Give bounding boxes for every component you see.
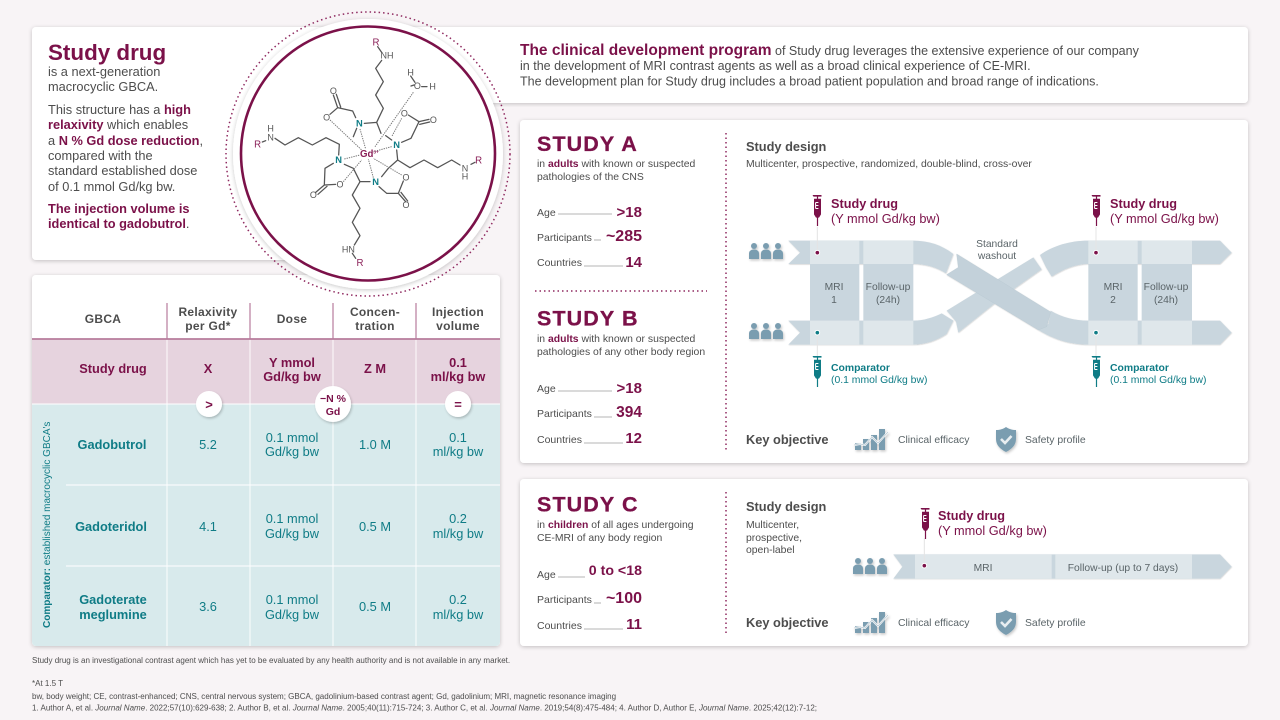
timeline arrow <box>893 538 1232 579</box>
study design text: prospective, <box>746 533 802 544</box>
program description text <box>520 42 1140 88</box>
intro text block: of 0.1 mmol Gd/kg bw. <box>48 179 175 194</box>
study drug row: ml/kg bw <box>431 369 485 384</box>
chemical structure of gadolinium complex: N <box>356 118 363 128</box>
footnotes: *At 1.5 T <box>32 679 63 688</box>
footnotes: 1. Author A, et al. Journal Name. 2022;57(10):629-638; 2. Author B, et al. Journal Name. 2005;40(11):715-724; 3. Author C, et al. Journal Name. 2019;54(8):475-484; 4. Author D, Author E, Journal Name. 2025;42(12):7-12; <box>32 704 817 712</box>
gadoteridol row: Gadoteridol <box>75 519 147 534</box>
study C summary: Age <box>537 569 556 581</box>
gadoteridol row: 4.1 <box>199 519 217 534</box>
gadoterate meglumine row: 0.2 <box>449 592 467 607</box>
syringe and label: comparator dose 1 <box>812 356 927 387</box>
single-arm study diagram: MRI <box>974 563 992 574</box>
bottom right band <box>1038 311 1232 345</box>
syringe and label: study drug dose 1: Study drug <box>831 197 898 211</box>
chemical structure of gadolinium complex: Gd <box>360 149 373 160</box>
gadobutrol row <box>78 430 484 459</box>
key objective row: Key objective <box>746 432 829 447</box>
icon: safety shield <box>996 610 1016 635</box>
panel: study A and study B <box>520 120 1248 463</box>
gadoterate meglumine row: 3.6 <box>199 599 217 614</box>
gadobutrol row: Gadobutrol <box>78 437 146 452</box>
column labels: 1 <box>831 295 837 306</box>
table header: GBCA <box>85 312 121 326</box>
column labels: MRI <box>1104 282 1122 293</box>
key objective row <box>746 427 1086 452</box>
panel: study drug intro <box>32 27 332 260</box>
study A summary: ~285 <box>606 228 642 245</box>
syringe and label: comparator dose 2 <box>1092 356 1206 387</box>
column labels <box>825 239 1189 306</box>
chemical structure of gadolinium complex: R <box>475 156 482 167</box>
gadobutrol row: 1.0 M <box>359 437 391 452</box>
icon: safety shield <box>996 427 1016 452</box>
chemical structure of gadolinium complex: O <box>330 86 337 96</box>
study drug row <box>79 355 485 384</box>
syringe and label: study drug <box>920 508 1047 539</box>
top left band <box>788 241 953 273</box>
crossing strip falling <box>947 254 1051 330</box>
study B summary: 394 <box>616 404 642 421</box>
rotated comparator label: Comparator: established macrocyclic GBCA's <box>42 422 53 628</box>
badge: equal <box>445 391 471 417</box>
intro text block: identical to gadobutrol. <box>48 216 189 231</box>
gadobutrol row: 5.2 <box>199 437 217 452</box>
syringe and label: study drug dose 2: (Y mmol Gd/kg bw) <box>1110 211 1219 226</box>
syringe and label: comparator dose 1: Comparator <box>831 363 890 374</box>
single-arm study diagram <box>853 508 1232 579</box>
footnotes: Study drug is an investigational contrast agent which has yet to be evaluated by any health authority and is not available in any market. <box>32 656 510 665</box>
badge: greater than: > <box>205 397 213 412</box>
intro text block: compared with the <box>48 148 153 163</box>
syringe and label: study drug dose 2 <box>1092 195 1219 226</box>
gadoteridol row: 0.2 <box>449 511 467 526</box>
chemical structure of gadolinium complex: N <box>335 155 342 165</box>
gadoterate meglumine row: ml/kg bw <box>433 607 484 622</box>
syringe and label: comparator dose 1: (0.1 mmol Gd/kg bw) <box>831 375 927 386</box>
study B summary: Participants <box>537 408 592 420</box>
comparator rows background <box>32 404 500 646</box>
column labels: (24h) <box>1154 295 1178 306</box>
study A summary: Countries <box>537 257 582 269</box>
study C summary: ~100 <box>606 590 642 607</box>
badge: equal: = <box>454 397 462 412</box>
study design text: Multicenter, <box>746 520 799 531</box>
column labels: (24h) <box>876 295 900 306</box>
chemical structure of gadolinium complex: N <box>372 177 379 187</box>
chemical structure of gadolinium complex: O <box>402 200 409 210</box>
study B summary: in adults with known or suspected <box>537 334 695 345</box>
intro text block: is a next-generation <box>48 64 160 79</box>
chemical structure of gadolinium complex: H <box>407 67 414 77</box>
panel: study C <box>520 479 1248 646</box>
intro text block: a N % Gd dose reduction, <box>48 133 203 148</box>
study B summary: 12 <box>625 430 642 447</box>
gadoterate meglumine row: meglumine <box>79 607 147 622</box>
table header: Concen- <box>350 305 400 319</box>
column labels: Follow-up <box>866 282 911 293</box>
molecule structure circle <box>226 12 510 296</box>
study C summary: Participants <box>537 594 592 606</box>
study drug row: Y mmol <box>269 355 315 370</box>
badge: greater than <box>196 391 222 417</box>
chemical structure of gadolinium complex: R <box>373 37 380 48</box>
gadoteridol row <box>75 511 484 541</box>
study drug row: Gd/kg bw <box>263 369 321 384</box>
syringe and label: study drug: Study drug <box>938 509 1005 523</box>
gadobutrol row: Gd/kg bw <box>265 444 320 459</box>
chemical structure of gadolinium complex: N <box>462 163 468 173</box>
gadoterate meglumine row: Gd/kg bw <box>265 607 320 622</box>
gadoterate meglumine row: Gadoterate <box>79 592 147 607</box>
icon: clinical efficacy chart <box>854 429 888 450</box>
study C summary: 0 to <18 <box>589 563 642 579</box>
chemical structure of gadolinium complex: O <box>402 172 409 182</box>
study B summary <box>537 306 705 447</box>
chemical structure of gadolinium complex: H <box>462 171 468 181</box>
study drug row: Z M <box>364 361 386 376</box>
key objective row: Safety profile <box>1025 435 1086 446</box>
participants icons top <box>749 243 783 259</box>
key objective row: Clinical efficacy <box>898 618 970 629</box>
gadoteridol row: 0.1 mmol <box>266 511 318 526</box>
intro text block: standard established dose <box>48 163 197 178</box>
column labels: Follow-up <box>1144 282 1189 293</box>
study A summary: >18 <box>617 204 642 221</box>
study drug row: Study drug <box>79 361 147 376</box>
program description text: The clinical development program of Study drug leverages the extensive experience of our company <box>520 42 1140 59</box>
study B summary: Age <box>537 383 556 395</box>
badge: minus N percent Gd <box>315 386 351 422</box>
chemical structure of gadolinium complex: H <box>267 124 274 134</box>
MRI and follow-up columns <box>810 264 1192 321</box>
table header: Dose <box>277 312 307 326</box>
syringe and label: comparator dose 2: (0.1 mmol Gd/kg bw) <box>1110 375 1206 386</box>
chemical structure of gadolinium complex: 3+ <box>373 150 379 155</box>
cross-over study diagram <box>749 195 1232 387</box>
intro text block: The injection volume is <box>48 201 190 216</box>
key objective row: Key objective <box>746 615 829 630</box>
study design heading: Multicenter, prospective, randomized, double-blind, cross-over <box>746 159 1032 170</box>
table header: volume <box>436 319 480 333</box>
footnotes: bw, body weight; CE, contrast-enhanced; CNS, central nervous system; GBCA, gadolinium-based contrast agent; Gd, gadolinium; MRI, magnetic resonance imaging <box>32 692 616 701</box>
study B summary: >18 <box>617 380 642 397</box>
table header: tration <box>355 319 395 333</box>
study B summary: Countries <box>537 434 582 446</box>
chemical structure of gadolinium complex: NH <box>381 51 393 61</box>
study drug row: 0.1 <box>449 355 467 370</box>
program description text: in the development of MRI contrast agents as well as a broad clinical experience of CE-MRI. <box>520 59 1031 73</box>
study design heading <box>746 139 1032 170</box>
study B summary: STUDY B <box>537 306 639 330</box>
single-arm study diagram: Follow-up (up to 7 days) <box>1068 563 1178 574</box>
icon: clinical efficacy chart <box>854 612 888 633</box>
gadoterate meglumine row: 0.5 M <box>359 599 391 614</box>
crossing strip rising <box>947 257 1042 333</box>
study A summary: pathologies of the CNS <box>537 172 644 183</box>
chemical structure of gadolinium complex: H <box>429 82 436 92</box>
key objective row: Safety profile <box>1025 618 1086 629</box>
study B summary: pathologies of any other body region <box>537 347 705 358</box>
chemical structure of gadolinium complex: O <box>414 81 421 91</box>
column labels: 2 <box>1110 295 1116 306</box>
panel: GBCA comparison table <box>32 275 500 646</box>
chemical structure of gadolinium complex: R <box>254 140 261 151</box>
study C summary: 11 <box>626 616 642 633</box>
badge: minus N percent Gd: −N % <box>320 393 347 405</box>
intro text block: macrocyclic GBCA. <box>48 79 158 94</box>
study A summary: Age <box>537 207 556 219</box>
key objective row <box>746 610 1086 635</box>
participants icons bottom <box>749 323 783 339</box>
syringe and label: study drug dose 1: (Y mmol Gd/kg bw) <box>831 211 940 226</box>
intro text block <box>48 64 203 231</box>
gadoterate meglumine row <box>79 592 484 622</box>
badge: minus N percent Gd: Gd <box>326 406 340 418</box>
study C summary: in children of all ages undergoing <box>537 520 694 531</box>
column labels: washout <box>977 251 1016 262</box>
study C summary: Countries <box>537 620 582 632</box>
study C summary <box>537 492 694 633</box>
syringe and label: comparator dose 2: Comparator <box>1110 363 1169 374</box>
chemical structure of gadolinium complex: O <box>310 190 317 200</box>
study A summary: in adults with known or suspected <box>537 159 695 170</box>
chemical structure of gadolinium complex: O <box>323 112 330 122</box>
participants icons <box>853 558 887 574</box>
intro text block: This structure has a high <box>48 102 191 117</box>
table header <box>85 305 484 333</box>
chemical structure of gadolinium complex: R <box>357 258 364 269</box>
gadoteridol row: ml/kg bw <box>433 526 484 541</box>
gadoteridol row: 0.5 M <box>359 519 391 534</box>
intro text block: relaxivity which enables <box>48 117 188 132</box>
top right band <box>1040 241 1232 277</box>
study C summary: STUDY C <box>537 492 639 516</box>
chemical structure of gadolinium complex <box>254 37 482 269</box>
table header: per Gd* <box>185 319 231 333</box>
table header: Injection <box>432 305 484 319</box>
study A summary <box>537 132 695 271</box>
column labels: Standard <box>976 239 1018 250</box>
chemical structure of gadolinium complex: N <box>393 140 400 150</box>
key objective row: Clinical efficacy <box>898 435 970 446</box>
gadoterate meglumine row: 0.1 mmol <box>266 592 318 607</box>
syringe and label: study drug dose 1 <box>812 195 940 226</box>
study design text: Study design <box>746 499 827 514</box>
chemical structure of gadolinium complex: O <box>401 108 408 118</box>
study C summary: CE-MRI of any body region <box>537 533 663 544</box>
gadobutrol row: ml/kg bw <box>433 444 484 459</box>
study A summary: Participants <box>537 232 592 244</box>
study drug row: X <box>204 361 213 376</box>
gadobutrol row: 0.1 <box>449 430 467 445</box>
gadoteridol row: Gd/kg bw <box>265 526 320 541</box>
syringe and label: study drug: (Y mmol Gd/kg bw) <box>938 523 1047 538</box>
panel: clinical development program intro <box>330 27 1248 103</box>
gadobutrol row: 0.1 mmol <box>266 430 318 445</box>
study design text: open-label <box>746 545 795 556</box>
study design text <box>746 499 827 556</box>
study A summary: 14 <box>625 254 643 271</box>
heading: study drug: Study drug <box>48 40 166 65</box>
chemical structure of gadolinium complex: HN <box>342 244 355 254</box>
table header: Relaxivity <box>178 305 238 319</box>
bottom left band <box>788 313 953 345</box>
footnotes <box>32 656 817 712</box>
study drug row background <box>32 339 500 404</box>
column labels: MRI <box>825 282 843 293</box>
chemical structure of gadolinium complex: O <box>430 115 437 125</box>
chemical structure of gadolinium complex: N <box>267 132 274 142</box>
syringe and label: study drug dose 2: Study drug <box>1110 197 1177 211</box>
study design heading: Study design <box>746 139 827 154</box>
chemical structure of gadolinium complex: O <box>336 179 343 189</box>
program description text: The development plan for Study drug includes a broad patient population and broad range of indications. <box>520 74 1099 88</box>
study A summary: STUDY A <box>537 132 638 156</box>
